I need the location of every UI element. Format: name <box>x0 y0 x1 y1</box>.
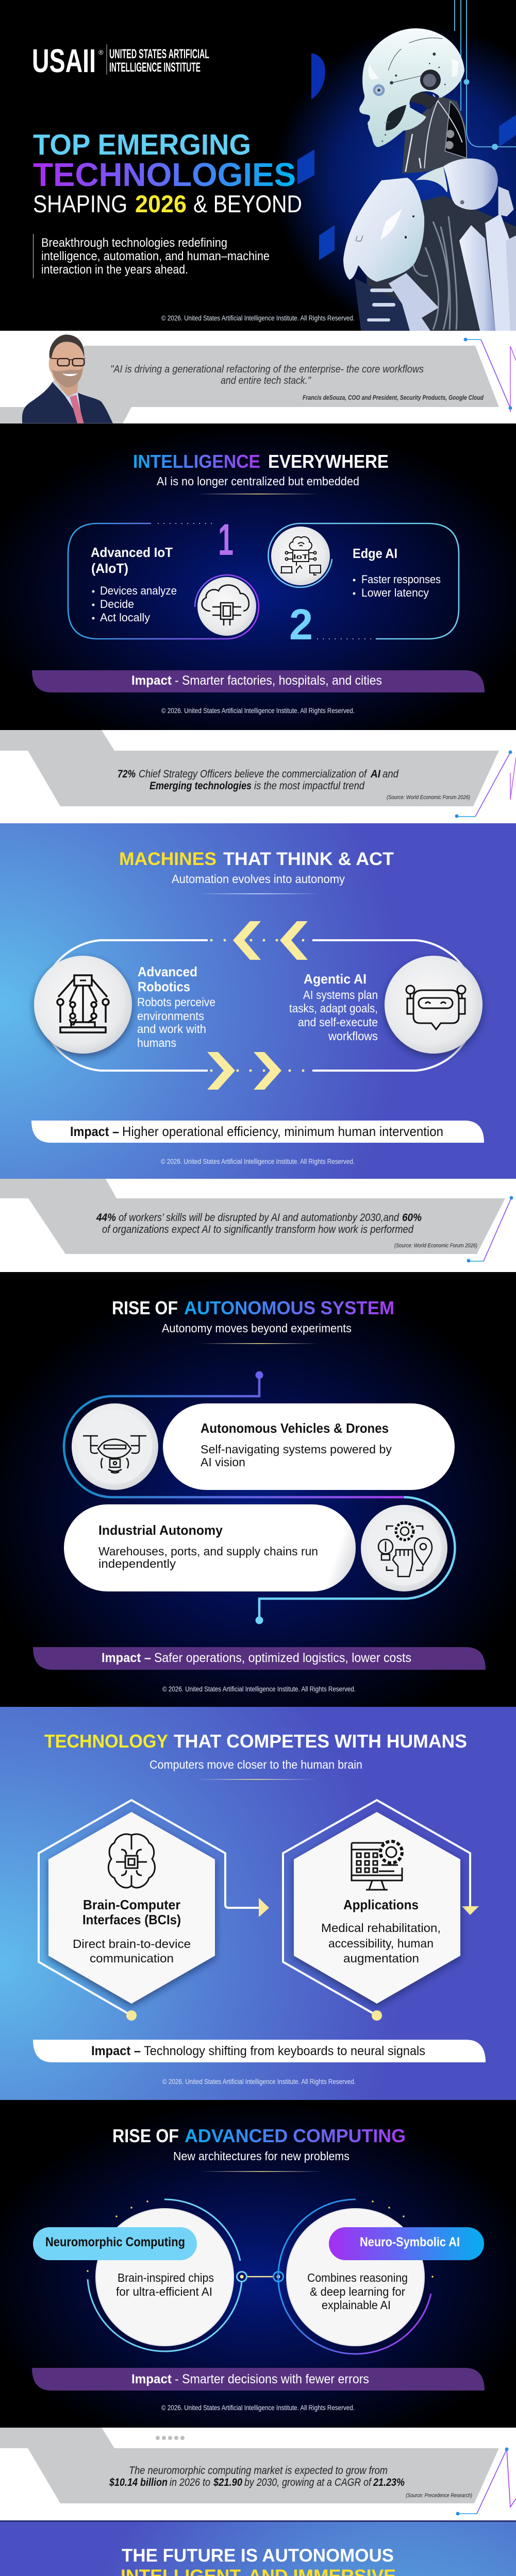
card: Advanced IoT: Advanced IoT <box>91 545 173 560</box>
card: brain-computer interfaces: communication <box>90 1952 174 1965</box>
card: Advanced IoT: (AIoT) <box>91 561 128 576</box>
stat text: and <box>382 768 399 780</box>
stat text: (Source: World Economic Forum 2026) <box>387 794 470 801</box>
card: neuromorphic computing: Brain-inspired chips <box>118 2271 214 2284</box>
card: Edge AI <box>268 523 459 649</box>
card: Edge AI: IoT <box>293 553 308 561</box>
card: Advanced IoT: Act locally <box>100 611 150 624</box>
heading <box>133 451 389 495</box>
card: Edge AI: Lower latency <box>361 586 429 599</box>
torso internals <box>361 196 516 331</box>
hero intro text: interaction in the years ahead. <box>41 263 188 277</box>
impact bar: Technology shifting from keyboards to neural signals <box>144 2044 425 2058</box>
heading <box>44 1731 467 1780</box>
icon: gear bulb pin hand <box>378 1522 432 1577</box>
card: industrial autonomy: Industrial Autonomy <box>98 1522 223 1538</box>
impact bar: Safer operations, optimized logistics, lower costs <box>154 1651 411 1665</box>
stat text <box>118 768 470 801</box>
card: brain-computer interfaces <box>39 1800 269 2021</box>
heading: TECHNOLOGY <box>44 1731 168 1752</box>
panel: intelligence everywhere <box>0 423 516 730</box>
logo: USAII <box>32 42 96 79</box>
stat text: Emerging technologies <box>149 780 252 792</box>
card: advanced robotics: humans <box>137 1036 176 1049</box>
card: neuromorphic computing <box>33 2199 242 2351</box>
icon: app window and gear <box>352 1841 402 1890</box>
card: industrial autonomy: independently <box>98 1557 176 1570</box>
icon: IoT network <box>280 537 321 575</box>
card: agentic AI: Agentic AI <box>304 971 367 987</box>
icon: robotic arms <box>57 975 109 1032</box>
portrait <box>22 334 113 423</box>
quote text: and entire tech stack." <box>221 375 311 386</box>
panel: machines that think and act <box>0 823 516 1179</box>
heading <box>112 2125 406 2172</box>
title: TECHNOLOGIES <box>33 156 296 193</box>
heading: THE FUTURE IS AUTONOMOUS <box>122 2546 394 2566</box>
heading: RISE OF <box>112 2125 179 2146</box>
hero intro text <box>33 234 270 278</box>
card: Edge AI: Edge AI <box>353 546 397 561</box>
stat text: AI <box>370 768 381 780</box>
card: neuro-symbolic AI: & deep learning for <box>310 2285 405 2298</box>
card: autonomous vehicles and drones: Autonomous Vehicles & Drones <box>201 1420 389 1436</box>
hero intro text: Breakthrough technologies redefining <box>41 236 227 250</box>
title <box>33 128 302 217</box>
heading <box>112 1297 394 1344</box>
heading: AI is no longer centralized but embedded <box>157 474 359 488</box>
card: brain-computer interfaces: Interfaces (BCIs) <box>82 1912 181 1927</box>
heading: INTELLIGENCE <box>133 451 260 472</box>
panel: rise of autonomous system <box>0 1272 516 1707</box>
heading: THAT COMPETES WITH HUMANS <box>174 1731 467 1752</box>
impact bar <box>33 2040 486 2062</box>
heading: Computers move closer to the human brain <box>149 1758 362 1771</box>
stat text <box>96 1212 477 1249</box>
card: advanced robotics: Robotics <box>138 979 190 994</box>
heading <box>119 849 394 894</box>
impact bar <box>32 670 485 692</box>
heading: New architectures for new problems <box>173 2149 349 2163</box>
panel: the future <box>0 2520 516 2576</box>
arrows <box>207 921 308 1090</box>
stat text: of workers’ skills will be disrupted by AI and automationby 2030,and <box>119 1212 400 1224</box>
stat text: 44% <box>96 1212 116 1224</box>
title: 2026 <box>135 190 187 217</box>
card: Advanced IoT: Devices analyze <box>100 584 177 597</box>
card: brain-computer interfaces: Brain-Computer <box>83 1897 180 1912</box>
card: brain-computer interfaces: Direct brain-to-device <box>73 1937 191 1951</box>
card: neuro-symbolic AI <box>278 2199 484 2354</box>
connector path <box>64 1371 455 1624</box>
card: advanced robotics: Robots perceive <box>137 995 215 1009</box>
card: neuromorphic computing: for ultra-efficient AI <box>116 2285 212 2298</box>
card: Edge AI: Faster responses <box>361 573 441 586</box>
panel: technology that competes with humans <box>0 1707 516 2100</box>
stat text: of organizations expect AI to significantly transform how work is performed <box>102 1224 414 1235</box>
logo: INTELLIGENCE INSTITUTE <box>109 60 201 75</box>
heading: Autonomy moves beyond experiments <box>162 1321 352 1335</box>
card: autonomous vehicles and drones: Self-navigating systems powered by <box>201 1443 392 1456</box>
card: industrial autonomy: Warehouses, ports, and supply chains run <box>98 1545 318 1558</box>
panel: quote <box>0 331 516 423</box>
chest plate <box>343 178 424 282</box>
card: advanced robotics <box>34 956 215 1054</box>
icon: brain chip <box>108 1834 155 1888</box>
stat text: is the most impactful trend <box>254 780 365 792</box>
icon: chatbot <box>406 986 465 1029</box>
card: agentic AI: and self-execute <box>298 1015 378 1029</box>
title: TOP EMERGING <box>33 128 251 161</box>
logo <box>32 42 209 79</box>
heading: Automation evolves into autonomy <box>172 872 345 886</box>
copyright: © 2026. United States Artificial Intelligence Institute. All Rights Reserved. <box>161 2404 355 2412</box>
card: neuro-symbolic AI: explainable AI <box>322 2298 391 2312</box>
quote text <box>110 364 484 401</box>
stat text: 60% <box>402 1212 422 1224</box>
connector <box>456 2447 516 2515</box>
icon: drone <box>83 1436 146 1473</box>
white strut <box>389 273 439 331</box>
panel: hero <box>0 0 516 331</box>
card: agentic AI: AI systems plan <box>303 988 378 1002</box>
impact bar: Impact – <box>102 1651 151 1665</box>
circuit lines <box>455 0 516 149</box>
heading: EVERYWHERE <box>268 451 389 472</box>
panel: statistic 44% <box>0 1179 513 1262</box>
heading <box>121 2546 396 2576</box>
card: autonomous vehicles and drones: AI vision <box>201 1455 245 1469</box>
copyright: © 2026. United States Artificial Intelligence Institute. All Rights Reserved. <box>161 707 355 715</box>
card: agentic AI <box>289 956 482 1054</box>
impact bar: - Smarter factories, hospitals, and cities <box>175 673 382 688</box>
stat text: The neuromorphic computing market is expected to grow from <box>129 2465 388 2477</box>
impact bar: Impact – <box>91 2044 141 2058</box>
impact bar <box>32 2368 485 2391</box>
stat text: $10.14 billion <box>109 2477 168 2488</box>
panel: rise of advanced computing <box>0 2100 516 2428</box>
stat text: (Source: World Economic Forum 2026) <box>394 1243 477 1249</box>
icon: humanoid robot portrait <box>343 28 516 331</box>
title: SHAPING <box>33 190 127 217</box>
impact bar: Higher operational efficiency, minimum human intervention <box>122 1124 443 1139</box>
card: autonomous vehicles and drones <box>72 1403 455 1490</box>
card: applications: accessibility, human <box>328 1937 434 1950</box>
card: neuro-symbolic AI: Neuro-Symbolic AI <box>360 2235 460 2249</box>
logo: UNITED STATES ARTIFICIAL <box>109 47 209 61</box>
connector <box>467 1196 513 1262</box>
stat text: 72% <box>118 768 136 780</box>
connector dots <box>87 2200 434 2281</box>
stat text <box>109 2465 472 2499</box>
heading: THAT THINK & ACT <box>223 849 394 869</box>
card: applications <box>283 1800 479 2021</box>
head <box>359 28 464 147</box>
logo: ® <box>98 48 104 56</box>
heading: ADVANCED COMPUTING <box>185 2125 406 2146</box>
impact bar: Impact <box>131 2372 172 2386</box>
heading: AUTONOMOUS SYSTEM <box>184 1297 394 1318</box>
neck mechanics <box>359 28 514 216</box>
card: neuromorphic computing: Neuromorphic Computing <box>45 2235 185 2249</box>
impact bar <box>33 1647 486 1670</box>
card: Edge AI: 2 <box>289 600 313 649</box>
impact bar: Impact – <box>70 1124 119 1139</box>
panel: statistic 72% <box>0 730 516 818</box>
connector <box>455 750 516 818</box>
card: applications: Medical rehabilitation, <box>321 1921 441 1935</box>
heading: MACHINES <box>119 849 217 869</box>
card: neuro-symbolic AI: Combines reasoning <box>307 2271 408 2284</box>
diagram track <box>41 921 476 1090</box>
card: industrial autonomy <box>64 1504 447 1591</box>
card: advanced robotics: environments <box>137 1009 204 1023</box>
title: & BEYOND <box>193 190 302 217</box>
card: Advanced IoT: 1 <box>218 515 234 565</box>
panel: statistic neuromorphic market <box>0 2428 516 2515</box>
hero intro text: intelligence, automation, and human–machine <box>41 249 270 263</box>
stat text: 21.23% <box>373 2477 405 2488</box>
card: agentic AI: workflows <box>328 1029 378 1043</box>
copyright: © 2026. United States Artificial Intelligence Institute. All Rights Reserved. <box>161 314 355 322</box>
card: Advanced IoT: Decide <box>100 598 134 611</box>
copyright: © 2026. United States Artificial Intelligence Institute. All Rights Reserved. <box>162 2078 356 2086</box>
stat text: in 2026 to <box>170 2477 210 2488</box>
arms <box>459 225 495 331</box>
card: advanced robotics: and work with <box>137 1022 206 1036</box>
ribs <box>355 278 410 331</box>
quote text: "AI is driving a generational refactoring of the enterprise- the core workflows <box>110 364 424 375</box>
impact bar: - Smarter decisions with fewer errors <box>175 2372 369 2386</box>
impact bar: Impact <box>131 673 172 688</box>
heading: RISE OF <box>112 1297 178 1318</box>
stat text: $21.90 <box>213 2477 242 2488</box>
stat text: by 2030, growing at a CAGR of <box>244 2477 372 2488</box>
card: advanced robotics: Advanced <box>138 964 197 979</box>
icon: connector line <box>464 338 516 412</box>
icon: cloud chip <box>202 585 249 625</box>
copyright: © 2026. United States Artificial Intelligence Institute. All Rights Reserved. <box>161 1158 355 1165</box>
card: applications: Applications <box>343 1897 419 1912</box>
impact bar <box>31 1121 484 1143</box>
copyright: © 2026. United States Artificial Intelligence Institute. All Rights Reserved. <box>162 1685 356 1693</box>
card: agentic AI: tasks, adapt goals, <box>289 1002 378 1015</box>
stat text: Chief Strategy Officers believe the commercialization of <box>139 768 368 780</box>
card: applications: augmentation <box>343 1952 419 1965</box>
card: Advanced IoT <box>68 515 259 639</box>
stat text: (Source: Precedence Research) <box>406 2493 472 2499</box>
shoulder <box>443 158 498 210</box>
